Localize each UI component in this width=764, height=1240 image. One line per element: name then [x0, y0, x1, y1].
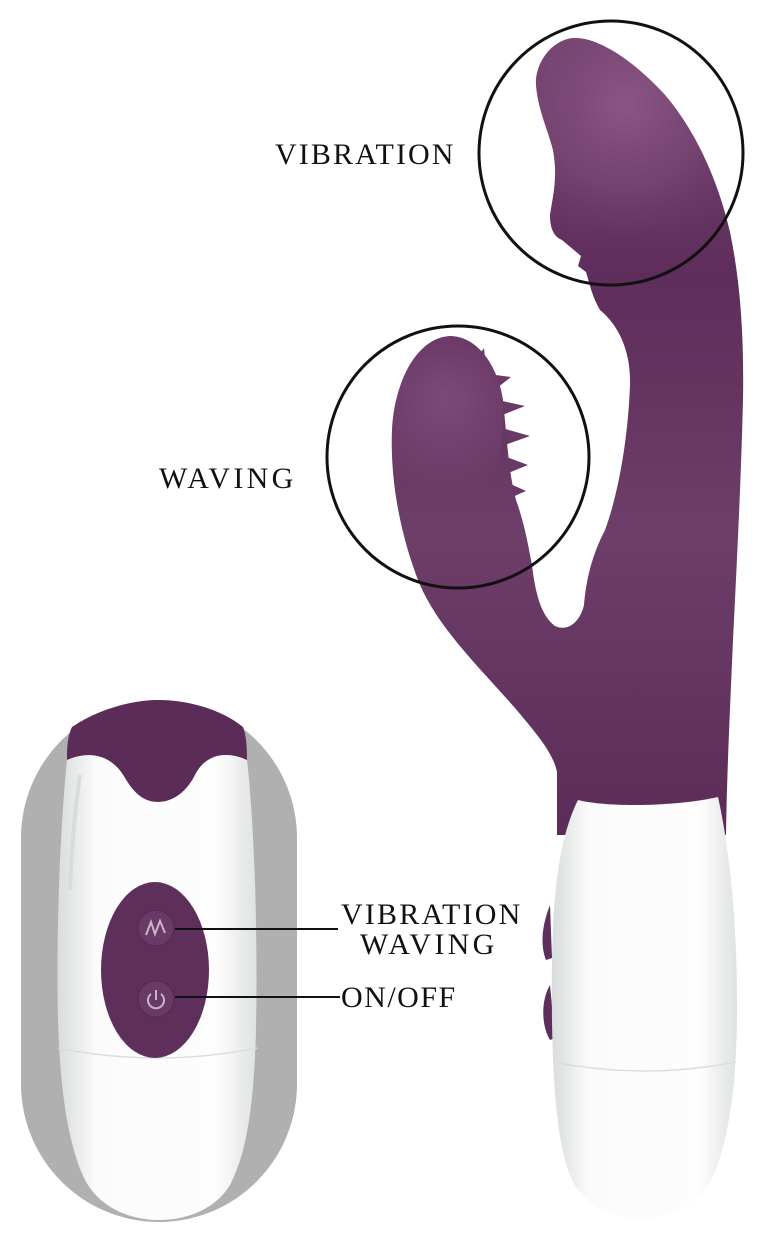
vibrator body [392, 38, 743, 835]
inset purple band [67, 700, 247, 802]
label: on/off: ON/OFF [341, 981, 457, 1014]
label: waving button: WAVING [360, 928, 498, 961]
label: vibration button: VIBRATION [341, 898, 522, 931]
vibration button [138, 910, 174, 946]
leader line: vibration waving [175, 928, 338, 930]
label: waving: WAVING [159, 462, 297, 495]
inset: remote handle close-up [21, 700, 297, 1222]
inset white handle [57, 755, 257, 1220]
inset background [21, 700, 297, 1222]
arm nubs [470, 348, 530, 498]
inset button panel [101, 882, 209, 1058]
power button [138, 981, 174, 1017]
callout circle: vibration [479, 21, 743, 285]
leader line: on/off [175, 996, 340, 998]
label: vibration: VIBRATION [275, 138, 456, 171]
callout circle: waving [327, 326, 589, 588]
handle with side buttons [543, 797, 737, 1218]
